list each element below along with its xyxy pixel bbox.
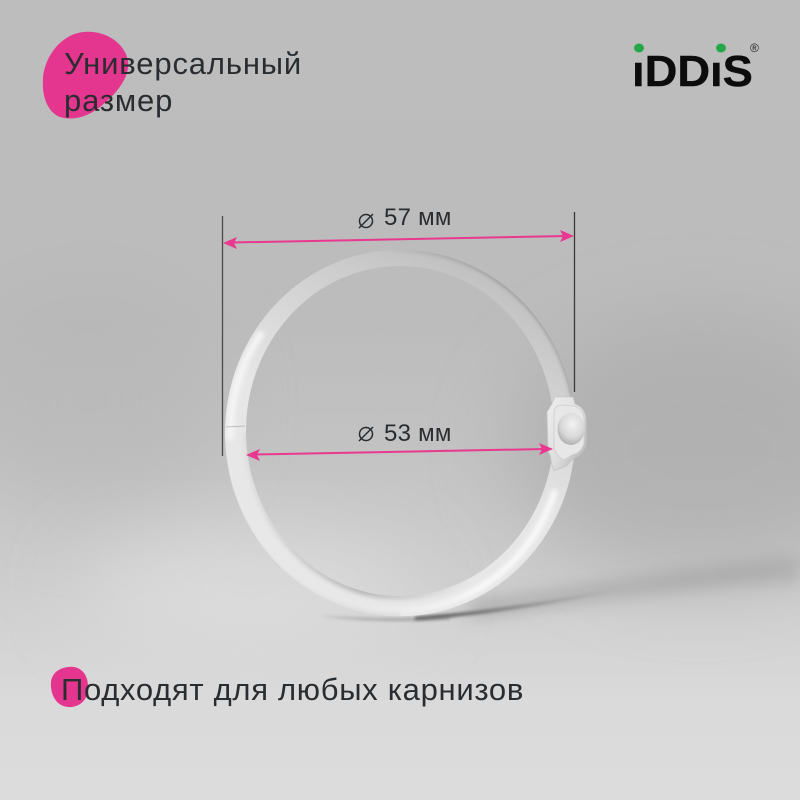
heading — [64, 46, 302, 118]
heading: Универсальный — [64, 46, 302, 81]
pink blob: caption — [51, 667, 88, 707]
arrow: 53 mm — [246, 443, 553, 461]
ring — [225, 248, 576, 616]
arrow: 57 mm — [223, 230, 574, 249]
soft background shading — [0, 280, 800, 645]
ring clasp — [547, 397, 586, 471]
logo dots — [634, 44, 726, 52]
label: 53 mm: 53 мм — [384, 420, 452, 447]
logo wordmark: ıDDıS — [632, 47, 753, 96]
ring cast shadow — [320, 556, 800, 621]
extension line left — [222, 216, 224, 456]
diameter symbol 53 — [359, 427, 373, 441]
label: 57 mm: 57 мм — [384, 204, 452, 231]
extension line right — [574, 212, 576, 392]
logo registered mark: ® — [750, 41, 759, 55]
caption: Подходят для любых карнизов — [61, 672, 524, 707]
pink blob: heading — [43, 32, 128, 119]
diameter symbol 57 — [359, 214, 373, 228]
heading: размер — [64, 83, 173, 118]
